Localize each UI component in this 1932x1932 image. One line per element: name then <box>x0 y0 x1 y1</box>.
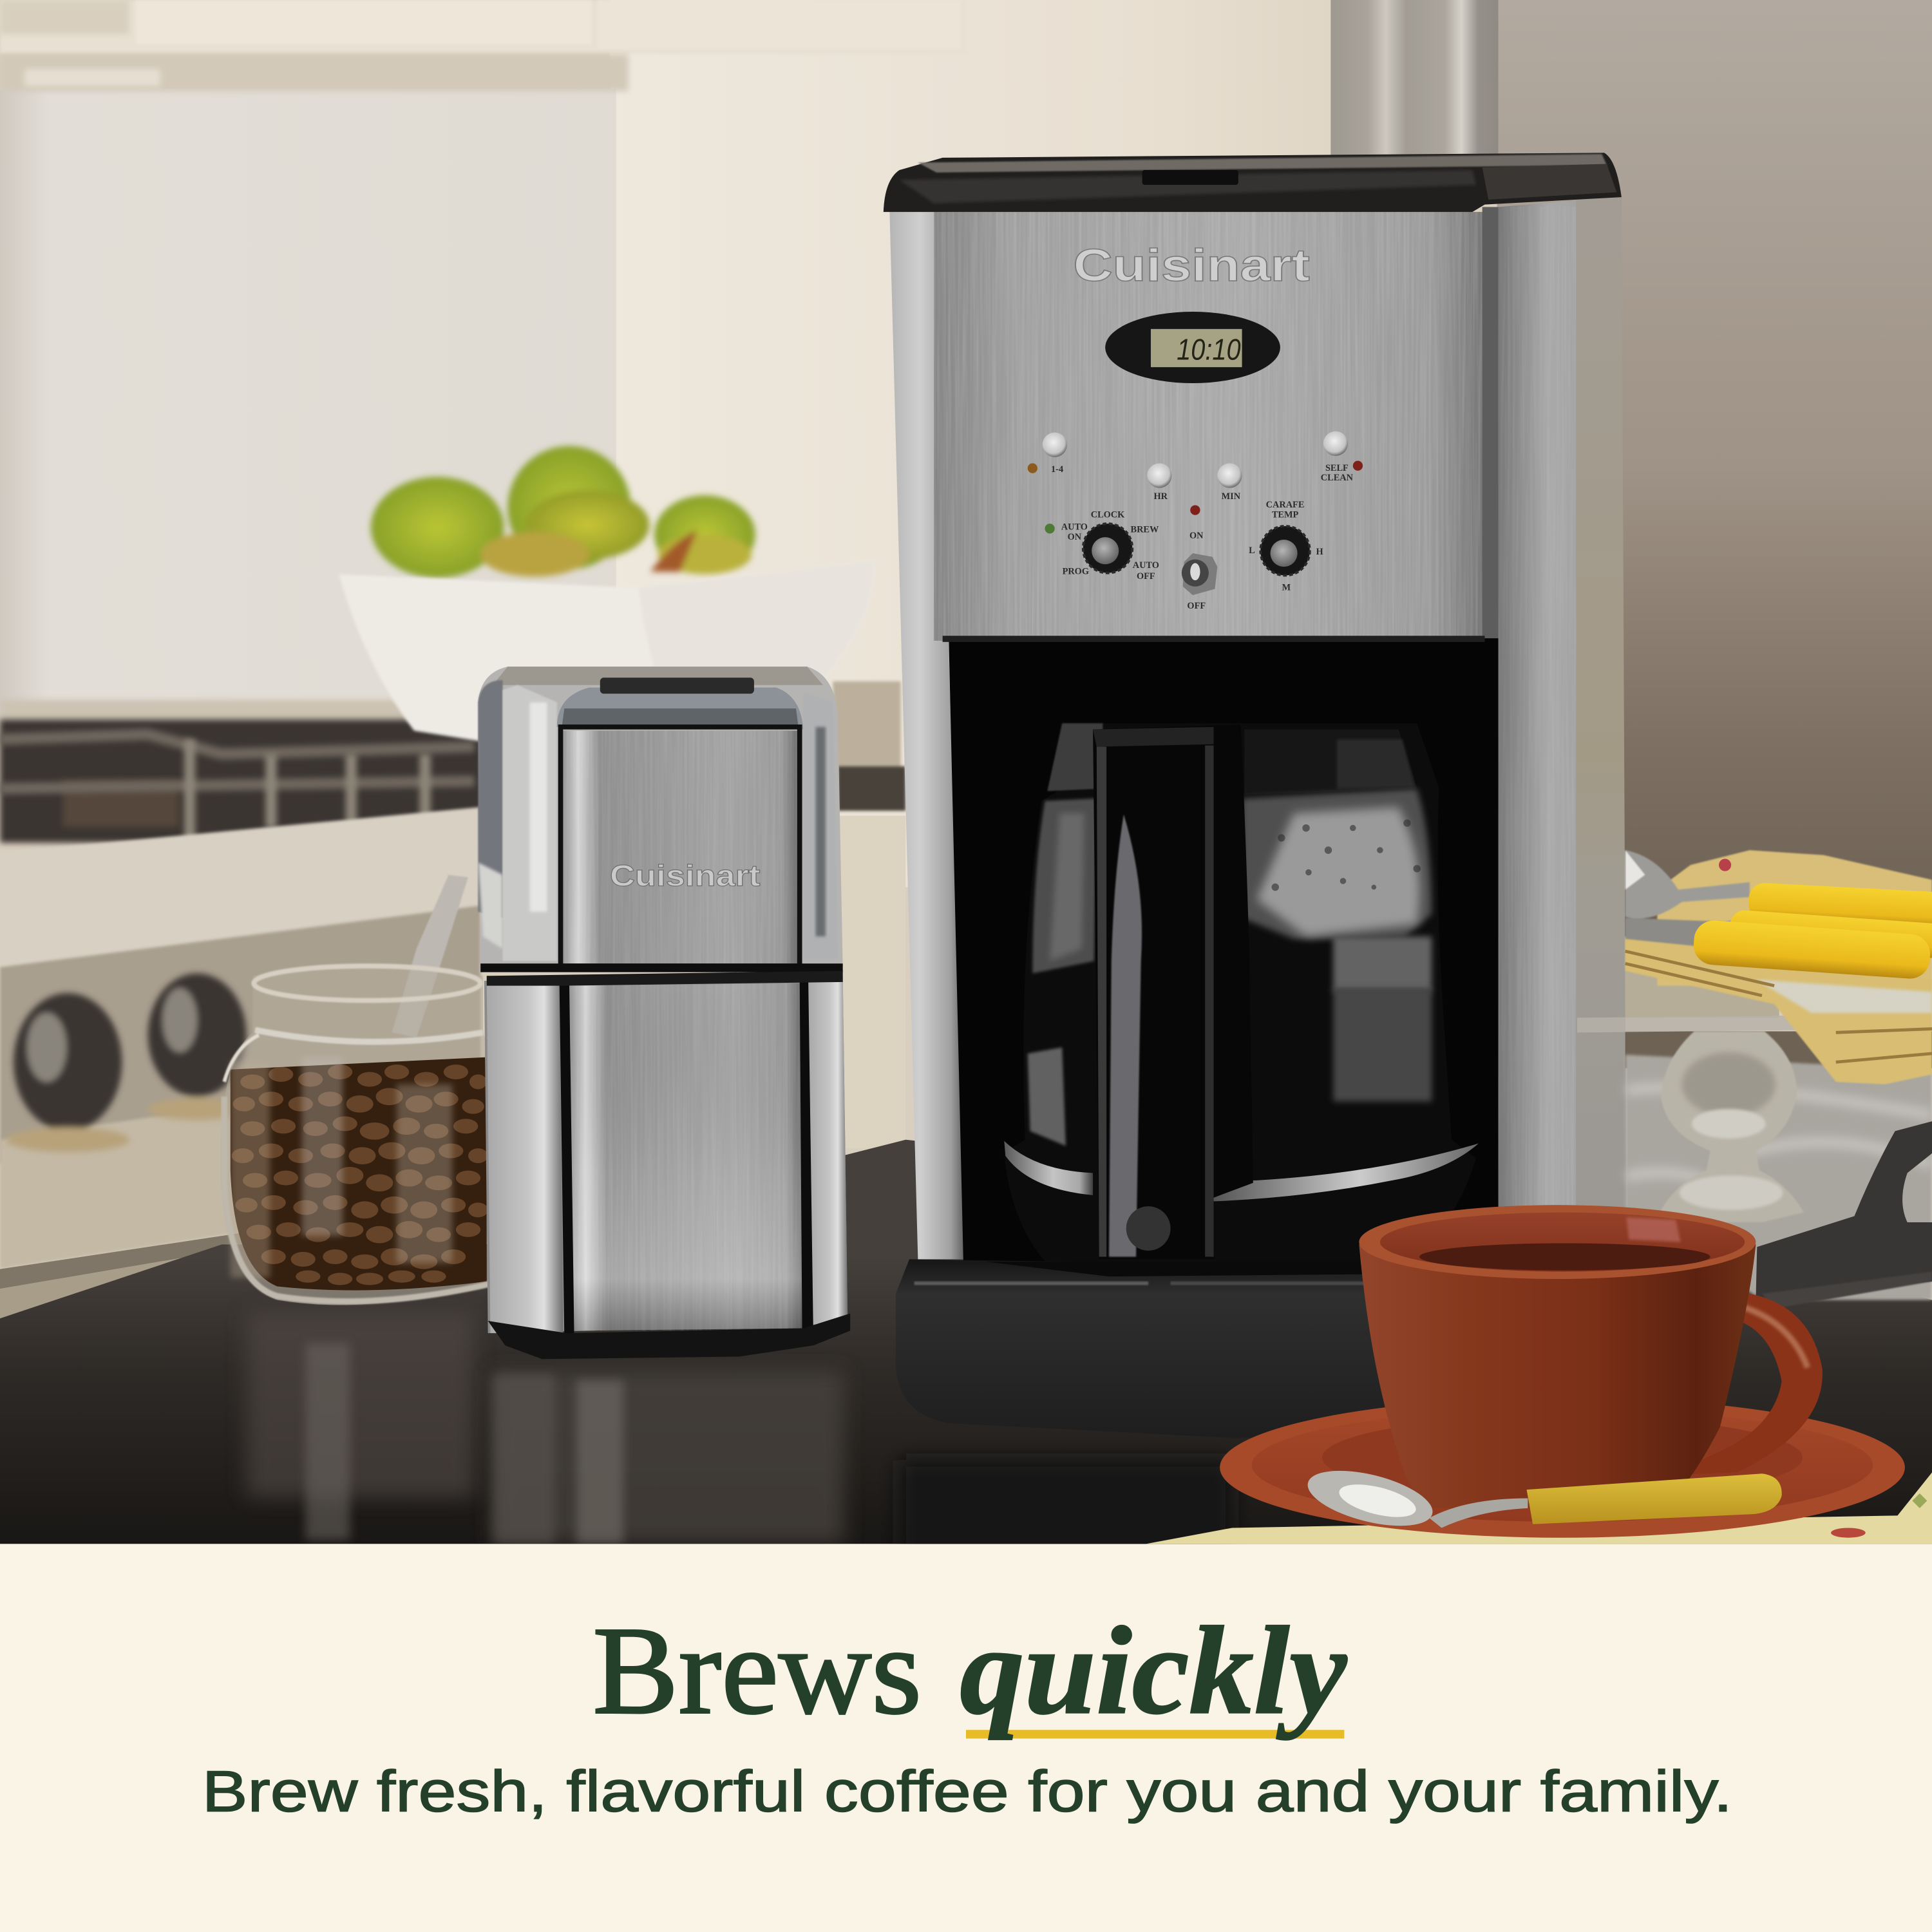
napkin <box>1625 850 1932 1084</box>
control labels: CLOCK <box>1091 510 1125 520</box>
terracotta coffee cup <box>1359 1205 1823 1508</box>
grinder brand name: Cuisinart <box>610 859 760 893</box>
grinder transparent lid <box>478 667 843 966</box>
clock display: 10:10 <box>1177 333 1241 366</box>
heading underline <box>966 1730 1344 1739</box>
cup handle <box>1673 1293 1823 1475</box>
jar rim and base <box>224 966 490 1302</box>
control labels: L <box>1249 545 1255 556</box>
left dial <box>1083 524 1132 573</box>
control labels: MIN <box>1222 491 1241 502</box>
stove <box>0 700 905 1318</box>
tray light waves <box>1627 1087 1932 1189</box>
control labels: HR <box>1154 491 1168 502</box>
carafe steel band <box>1004 1141 1093 1195</box>
right side column <box>1499 197 1624 1214</box>
subheading: Brew fresh, flavorful coffee for you and your family. <box>202 1759 1732 1824</box>
control labels: H <box>1316 547 1323 557</box>
background behind stand <box>1625 1031 1932 1068</box>
silver tray <box>1625 1055 1932 1300</box>
grinder base <box>488 1314 850 1359</box>
control labels: CLEAN <box>1321 473 1354 483</box>
control buttons <box>1043 431 1348 488</box>
teaspoon <box>1302 1460 1782 1537</box>
burr grinder <box>478 667 850 1359</box>
jar bean mass <box>231 1057 487 1291</box>
left side column <box>889 212 966 1259</box>
tray and cake stand with napkin <box>1577 850 1932 1309</box>
control labels: M <box>1282 582 1291 592</box>
heading <box>592 1601 1348 1740</box>
control labels: 1-4 <box>1051 464 1063 475</box>
heading emphasis: quickly <box>960 1601 1348 1740</box>
coffee maker <box>884 153 1627 1438</box>
grinder upper steel panel <box>561 727 800 966</box>
control labels: BREW <box>1131 525 1159 535</box>
left glass reflections <box>1032 799 1097 973</box>
coffee beans <box>232 1065 488 1285</box>
yellow handles <box>1692 882 1932 980</box>
jar glass <box>220 967 492 1305</box>
control labels: PROG <box>1063 567 1089 577</box>
heading: Brews <box>592 1601 922 1740</box>
glass carafe <box>1004 723 1479 1276</box>
floral cloth <box>1146 1472 1932 1544</box>
jar reflections <box>231 1057 452 1278</box>
control labels: AUTO <box>1133 560 1159 571</box>
measuring spoon <box>392 875 468 1037</box>
cup body <box>1359 1244 1756 1508</box>
control labels: OFF <box>1137 571 1155 582</box>
control labels: TEMP <box>1272 510 1298 520</box>
grinder lid handle <box>600 677 754 694</box>
control labels: CARAFE <box>1266 500 1304 510</box>
icon: stove knobs <box>6 973 247 1152</box>
cup rim <box>1359 1205 1756 1279</box>
grinder lower body <box>480 963 848 1336</box>
control labels: ON <box>1068 532 1082 542</box>
control labels: AUTO <box>1061 522 1088 533</box>
coffee bean jar <box>220 875 492 1305</box>
carafe collar <box>1047 723 1103 791</box>
silver spoons <box>1625 850 1750 946</box>
coffee maker base <box>896 1259 1392 1438</box>
saucer <box>1220 1397 1905 1538</box>
right glass reflection <box>1576 197 1627 1214</box>
tray handle <box>1756 1121 1932 1300</box>
clock display <box>1105 312 1280 383</box>
control labels <box>1051 463 1354 611</box>
front steel control panel <box>934 207 1499 641</box>
counter <box>0 1140 1932 1544</box>
carafe cavity <box>949 638 1499 1269</box>
control labels: ON <box>1189 531 1204 541</box>
toggle switch <box>1182 553 1217 595</box>
carafe handle <box>1093 724 1253 1259</box>
right dial <box>1260 526 1310 575</box>
cup interior <box>1380 1213 1745 1271</box>
background wall and cabinets <box>0 0 1932 1544</box>
counter reflections <box>247 1312 1232 1571</box>
condensation <box>1242 788 1432 939</box>
cake plate reflection <box>1625 936 1779 1018</box>
brand name: Cuisinart <box>1073 240 1310 291</box>
indicator lights <box>1028 461 1363 533</box>
control labels: SELF <box>1325 463 1349 473</box>
lid <box>884 153 1622 212</box>
cup highlight <box>1627 1217 1681 1242</box>
tray lower lip <box>1762 1271 1932 1309</box>
bowl of pears <box>340 441 760 743</box>
control labels: OFF <box>1187 601 1206 611</box>
glass stand <box>1577 1016 1806 1222</box>
coffee surface <box>1419 1243 1710 1271</box>
coffee level reflection <box>1333 936 1432 992</box>
